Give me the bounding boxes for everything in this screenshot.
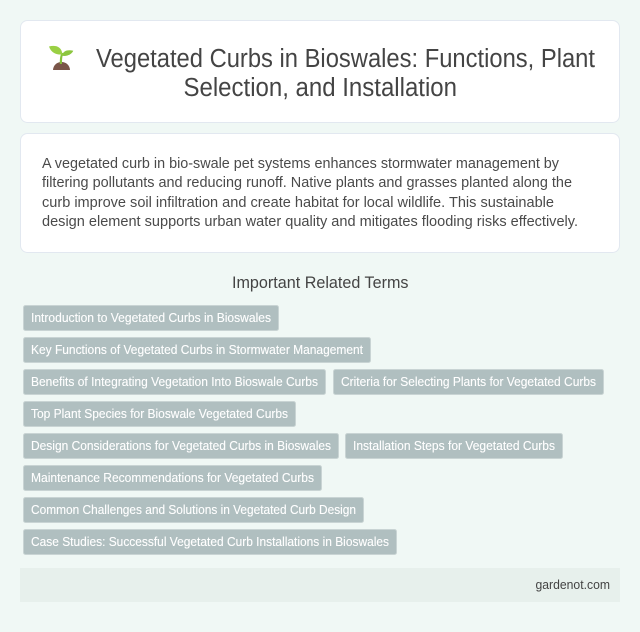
description text: design element supports urban water quality and mitigates flooding risks effectively. bbox=[42, 213, 578, 230]
chip: key functions: Key Functions of Vegetated Curbs in Stormwater Management bbox=[31, 343, 363, 357]
chip: top plant species: Top Plant Species for Bioswale Vegetated Curbs bbox=[31, 407, 288, 421]
heading: related terms: Important Related Terms bbox=[232, 274, 408, 292]
chip: top plant species bbox=[24, 402, 296, 426]
icon: seedling bbox=[49, 46, 73, 70]
chip: criteria: Criteria for Selecting Plants for Vegetated Curbs bbox=[341, 375, 596, 389]
chip: design considerations: Design Considerations for Vegetated Curbs in Bioswales bbox=[31, 439, 331, 453]
title bbox=[96, 45, 595, 102]
panel: description bbox=[20, 134, 620, 252]
chip: design considerations bbox=[24, 434, 338, 458]
description text: curb improve soil infiltration and create habitat for local wildlife. This sustainable bbox=[42, 194, 554, 211]
description text: filtering pollutants and reducing runoff. Native plants and grasses planted along the bbox=[42, 174, 572, 191]
chip: introduction: Introduction to Vegetated Curbs in Bioswales bbox=[31, 311, 271, 325]
chip: common challenges: Common Challenges and Solutions in Vegetated Curb Design bbox=[31, 503, 356, 517]
chip: case studies bbox=[24, 530, 396, 554]
chip: common challenges bbox=[24, 498, 364, 522]
title: Vegetated Curbs in Bioswales: Functions, Plant bbox=[96, 45, 595, 73]
panel: title card bbox=[20, 20, 620, 122]
chip: installation steps bbox=[346, 434, 562, 458]
chip: criteria bbox=[334, 370, 604, 394]
panel: related term chips bbox=[24, 306, 604, 554]
title: Selection, and Installation bbox=[184, 74, 457, 102]
chip: installation steps: Installation Steps for Vegetated Curbs bbox=[353, 439, 555, 453]
description text bbox=[42, 155, 578, 230]
description text: A vegetated curb in bio-swale pet systems enhances stormwater management by bbox=[42, 155, 559, 172]
chip: key functions bbox=[24, 338, 370, 362]
chip: benefits bbox=[24, 370, 326, 394]
chip: maintenance bbox=[24, 466, 322, 490]
chip: introduction bbox=[24, 306, 278, 330]
chip: case studies: Case Studies: Successful Vegetated Curb Installations in Bioswales bbox=[31, 535, 389, 549]
chip: benefits: Benefits of Integrating Vegetation Into Bioswale Curbs bbox=[31, 375, 318, 389]
footer: gardenot.com bbox=[536, 578, 610, 592]
chip: maintenance: Maintenance Recommendations for Vegetated Curbs bbox=[31, 471, 314, 485]
footer bbox=[20, 568, 620, 602]
